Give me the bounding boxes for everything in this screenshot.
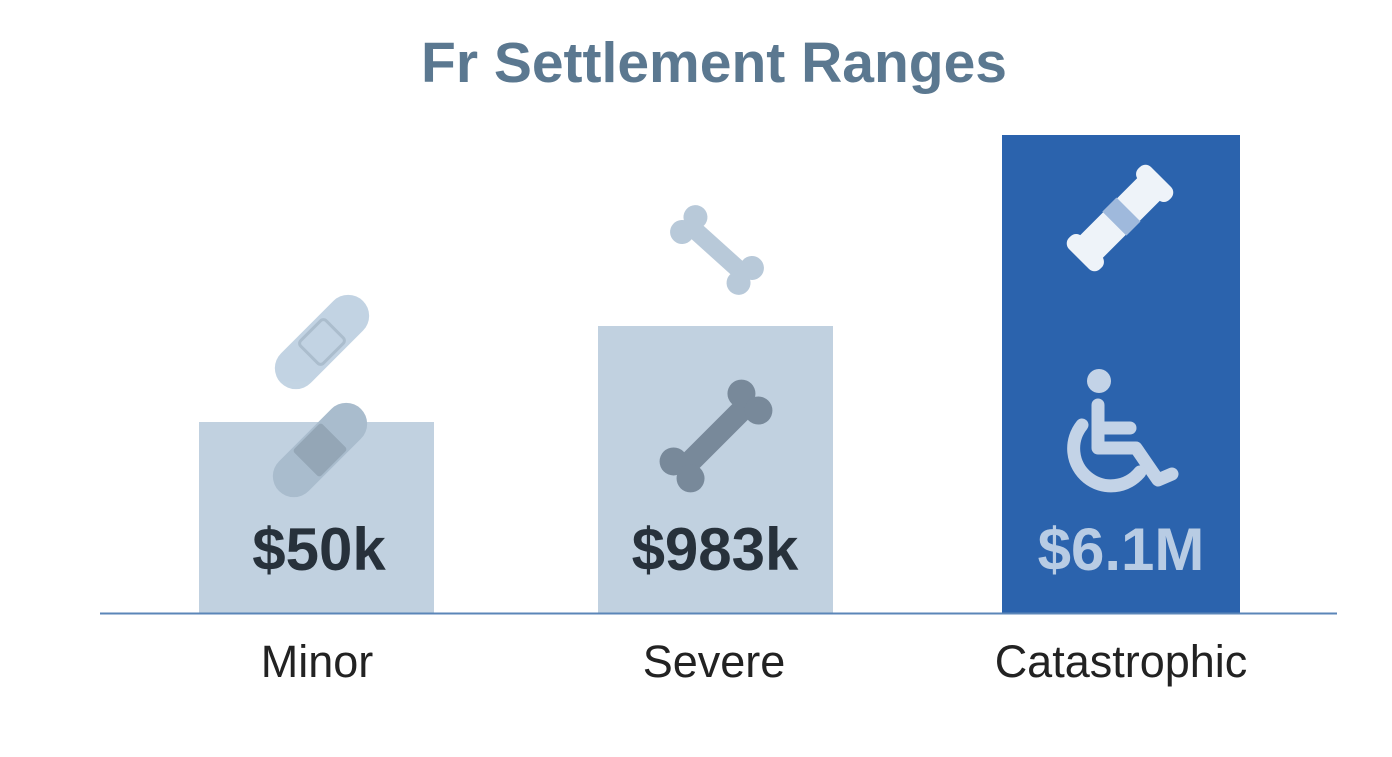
baseline	[100, 612, 1337, 614]
value: catastrophic: $6.1M	[1038, 516, 1204, 583]
bar: severe	[598, 200, 833, 613]
label: severe: Severe	[643, 636, 785, 687]
bar: minor	[199, 286, 434, 613]
icon: bandage bottom	[264, 394, 376, 506]
icon: wheelchair	[1074, 369, 1172, 486]
label: minor: Minor	[261, 636, 373, 687]
value: minor: $50k	[252, 516, 386, 583]
value: severe: $983k	[632, 516, 799, 583]
icon: bone	[654, 374, 778, 498]
bar: catastrophic	[1002, 135, 1240, 613]
icon: bandage top	[266, 286, 378, 398]
icon: broken bone above	[665, 200, 769, 300]
label: catastrophic: Catastrophic	[995, 636, 1247, 687]
icon: bandaged bone	[1063, 161, 1177, 275]
title: Fr Settlement Ranges	[421, 31, 1007, 95]
